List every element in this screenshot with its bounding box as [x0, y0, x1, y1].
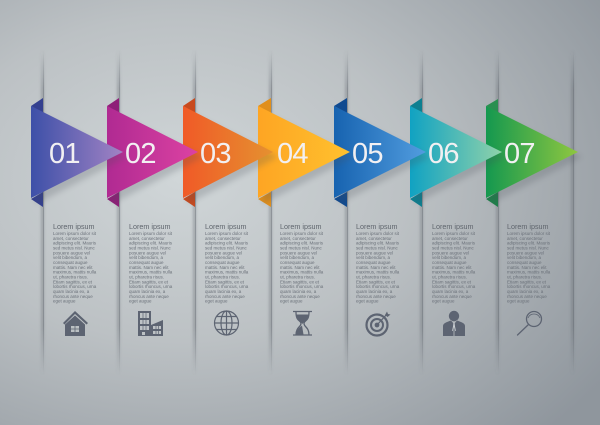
text block 5: ut, pharetra risus. [356, 274, 391, 280]
text block 1: sed metus nisl. Nunc [53, 246, 96, 251]
text block 6 [432, 222, 476, 304]
text block 2: velit bibendum, a [129, 255, 164, 260]
arrow 07: 07 [504, 138, 535, 170]
text block 5: mattis. Nam nec elit [356, 265, 396, 270]
text block 4: Lorem ipsum [280, 222, 322, 231]
text block 6: velit bibendum, a [432, 255, 467, 260]
text block 2: Etiam sagittis, ex et [129, 279, 169, 284]
text block 2: lobortis rhoncus, urna [129, 284, 173, 289]
text block 4: consequat augue [280, 260, 315, 265]
text block 6: Etiam sagittis, ex et [432, 279, 472, 284]
text block 7: amet, consectetur [507, 236, 543, 241]
text block 1: maximus, mattis nulla [53, 270, 97, 275]
arrow 05: 05 [352, 138, 383, 170]
text block 3: posuere augue vel [205, 250, 242, 255]
icon: target [366, 312, 390, 336]
text block 6: ut, pharetra risus. [432, 274, 467, 280]
text block 7: maximus, mattis nulla [507, 270, 551, 275]
text block 3 [205, 222, 249, 304]
text block 2: mattis. Nam nec elit [129, 265, 169, 270]
arrow 03 [183, 98, 278, 207]
text block 1: mattis. Nam nec elit [53, 265, 93, 270]
text block 6: maximus, mattis nulla [432, 270, 476, 275]
text block 4: sed metus nisl. Nunc [280, 246, 323, 251]
text block 7: Lorem ipsum dolor sit [507, 231, 551, 236]
text block 6: amet, consectetur [432, 236, 468, 241]
text block 4: Lorem ipsum dolor sit [280, 231, 324, 236]
text block 4: maximus, mattis nulla [280, 270, 324, 275]
text block 2: consequat augue [129, 260, 164, 265]
text block 7: consequat augue [507, 260, 542, 265]
text block 4: quam lacinia ex, a [280, 289, 317, 294]
text block 3: adipiscing elit. Mauris [205, 241, 249, 246]
text block 1: posuere augue vel [53, 250, 90, 255]
text block 1: Etiam sagittis, ex et [53, 279, 93, 284]
text block 6: Lorem ipsum dolor sit [432, 231, 476, 236]
text block 2: posuere augue vel [129, 250, 166, 255]
text block 4: adipiscing elit. Mauris [280, 241, 324, 246]
text block 6: mattis. Nam nec elit [432, 265, 472, 270]
arrow 01: 01 [49, 138, 80, 170]
icon: globe [214, 311, 238, 335]
text block 4: Etiam sagittis, ex et [280, 279, 320, 284]
text block 5: Lorem ipsum dolor sit [356, 231, 400, 236]
text block 6: consequat augue [432, 260, 467, 265]
icon: hourglass [293, 312, 312, 335]
text block 6: sed metus nisl. Nunc [432, 246, 475, 251]
text block 7: rhoncus ante neque [507, 294, 547, 299]
text block 7 [507, 222, 551, 304]
text block 1: consequat augue [53, 260, 88, 265]
icon: magnifying glass [518, 312, 542, 335]
text block 5: velit bibendum, a [356, 255, 391, 260]
text block 6: rhoncus ante neque [432, 294, 472, 299]
text block 3: eget augue [205, 299, 228, 304]
text block 2: Lorem ipsum dolor sit [129, 231, 173, 236]
text block 3: quam lacinia ex, a [205, 289, 242, 294]
text block 4: lobortis rhoncus, urna [280, 284, 324, 289]
text block 5: amet, consectetur [356, 236, 392, 241]
text block 4: rhoncus ante neque [280, 294, 320, 299]
text block 5: rhoncus ante neque [356, 294, 396, 299]
icon: businessman [443, 311, 465, 336]
text block 7: Lorem ipsum [507, 222, 549, 231]
text block 3: lobortis rhoncus, urna [205, 284, 249, 289]
arrow 01 [31, 98, 127, 207]
text block 5: Lorem ipsum [356, 222, 398, 231]
text block 6: quam lacinia ex, a [432, 289, 469, 294]
text block 7: posuere augue vel [507, 250, 544, 255]
text block 4: amet, consectetur [280, 236, 316, 241]
text block 4: mattis. Nam nec elit [280, 265, 320, 270]
text block 5 [356, 222, 400, 304]
text block 2: quam lacinia ex, a [129, 289, 166, 294]
text block 1: lobortis rhoncus, urna [53, 284, 97, 289]
text block 2: amet, consectetur [129, 236, 165, 241]
arrow 05 [334, 98, 430, 207]
text block 7: Etiam sagittis, ex et [507, 279, 547, 284]
text block 4 [280, 222, 324, 304]
text block 7: eget augue [507, 299, 530, 304]
text block 3: sed metus nisl. Nunc [205, 246, 248, 251]
text block 2: maximus, mattis nulla [129, 270, 173, 275]
text block 1: ut, pharetra risus. [53, 274, 88, 280]
text block 1: rhoncus ante neque [53, 294, 93, 299]
text block 3: amet, consectetur [205, 236, 241, 241]
text block 5: quam lacinia ex, a [356, 289, 393, 294]
text block 7: quam lacinia ex, a [507, 289, 544, 294]
text block 5: adipiscing elit. Mauris [356, 241, 400, 246]
panel dividers [41, 50, 574, 375]
text block 3: velit bibendum, a [205, 255, 240, 260]
text block 3: mattis. Nam nec elit [205, 265, 245, 270]
arrow 04: 04 [277, 138, 308, 170]
text block 5: eget augue [356, 299, 379, 304]
text block 2: rhoncus ante neque [129, 294, 169, 299]
text block 4: velit bibendum, a [280, 255, 315, 260]
text block 2: Lorem ipsum [129, 222, 171, 231]
text block 7: mattis. Nam nec elit [507, 265, 547, 270]
text block 1: Lorem ipsum dolor sit [53, 231, 97, 236]
text block 2: eget augue [129, 299, 152, 304]
text block 3: Lorem ipsum dolor sit [205, 231, 249, 236]
text block 1: adipiscing elit. Mauris [53, 241, 97, 246]
arrow 07 [486, 99, 582, 207]
arrow 03: 03 [200, 138, 231, 170]
text block 2: sed metus nisl. Nunc [129, 246, 172, 251]
text block 4: eget augue [280, 299, 303, 304]
text block 4: ut, pharetra risus. [280, 274, 315, 280]
text block 3: Etiam sagittis, ex et [205, 279, 245, 284]
text block 5: consequat augue [356, 260, 391, 265]
text block 3: ut, pharetra risus. [205, 274, 240, 280]
text block 3: Lorem ipsum [205, 222, 247, 231]
text block 7: adipiscing elit. Mauris [507, 241, 551, 246]
text block 3: maximus, mattis nulla [205, 270, 249, 275]
text block 3: consequat augue [205, 260, 240, 265]
text block 1: amet, consectetur [53, 236, 89, 241]
text block 1: velit bibendum, a [53, 255, 88, 260]
text block 7: velit bibendum, a [507, 255, 542, 260]
text block 7: lobortis rhoncus, urna [507, 284, 551, 289]
arrow 02: 02 [125, 138, 156, 170]
text block 5: posuere augue vel [356, 250, 393, 255]
text block 7: ut, pharetra risus. [507, 274, 542, 280]
text block 6: lobortis rhoncus, urna [432, 284, 476, 289]
icon: buildings [138, 311, 163, 336]
text block 3: rhoncus ante neque [205, 294, 245, 299]
arrow 02 [107, 98, 203, 207]
arrow 04 [258, 98, 354, 207]
text block 2: ut, pharetra risus. [129, 274, 164, 280]
text block 6: Lorem ipsum [432, 222, 474, 231]
text block 5: lobortis rhoncus, urna [356, 284, 400, 289]
text block 1: eget augue [53, 299, 76, 304]
arrow 06 [410, 98, 506, 207]
text block 6: adipiscing elit. Mauris [432, 241, 476, 246]
text block 6: posuere augue vel [432, 250, 469, 255]
text block 1: quam lacinia ex, a [53, 289, 90, 294]
text block 5: Etiam sagittis, ex et [356, 279, 396, 284]
text block 2 [129, 222, 173, 304]
text block 5: maximus, mattis nulla [356, 270, 400, 275]
text block 1 [53, 222, 97, 304]
text block 5: sed metus nisl. Nunc [356, 246, 399, 251]
text block 7: sed metus nisl. Nunc [507, 246, 550, 251]
text block 2: adipiscing elit. Mauris [129, 241, 173, 246]
text block 6: eget augue [432, 299, 455, 304]
text block 1: Lorem ipsum [53, 222, 95, 231]
icon: house [63, 311, 88, 336]
arrow 06: 06 [428, 138, 459, 170]
text block 4: posuere augue vel [280, 250, 317, 255]
